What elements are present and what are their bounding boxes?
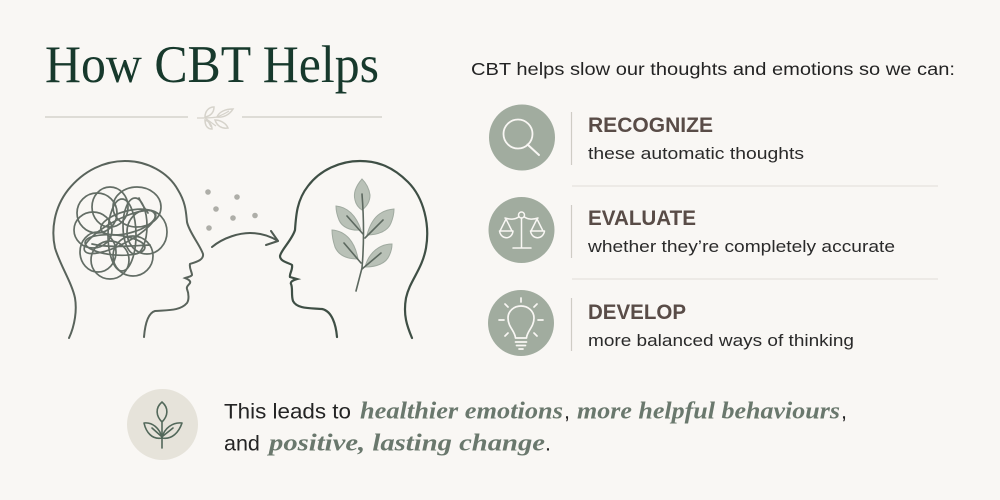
scribble [74, 187, 167, 279]
heading: RECOGNIZE [588, 114, 713, 137]
conclusion text: . [545, 432, 551, 456]
head outline [53, 161, 203, 338]
intro text: CBT helps slow our thoughts and emotions so we can: [471, 59, 955, 79]
step: recognize [489, 104, 804, 170]
row divider [572, 186, 938, 279]
divider [570, 112, 572, 165]
description: these automatic thoughts [588, 144, 804, 163]
conclusion text: This leads to [224, 400, 351, 424]
conclusion text: more helpful behaviours [577, 398, 840, 424]
right head: calm plant [280, 161, 427, 338]
thought dots [205, 189, 258, 231]
conclusion text: and [224, 432, 260, 456]
description: whether they’re completely accurate [587, 237, 895, 256]
divider [570, 298, 572, 351]
title divider with sprig [45, 107, 382, 129]
icon: light bulb [488, 290, 554, 356]
divider [570, 205, 572, 258]
leaves [332, 179, 394, 267]
step: develop [488, 290, 854, 356]
head outline [280, 161, 427, 338]
arrow [212, 231, 278, 247]
heading: DEVELOP [588, 301, 686, 324]
heading: EVALUATE [588, 207, 696, 230]
step: evaluate [488, 197, 895, 263]
conclusion text: positive, lasting change [267, 430, 545, 456]
conclusion text: , [564, 400, 570, 424]
conclusion text [224, 398, 847, 456]
left head: tangled thoughts [53, 161, 203, 338]
icon: scales [488, 197, 554, 263]
conclusion text: healthier emotions [360, 398, 563, 424]
icon: sprout badge [127, 389, 198, 460]
icon: magnifier [489, 104, 555, 170]
conclusion text: , [841, 400, 847, 424]
description: more balanced ways of thinking [588, 331, 854, 350]
title: How CBT Helps [45, 36, 379, 94]
stem and veins [344, 194, 383, 291]
